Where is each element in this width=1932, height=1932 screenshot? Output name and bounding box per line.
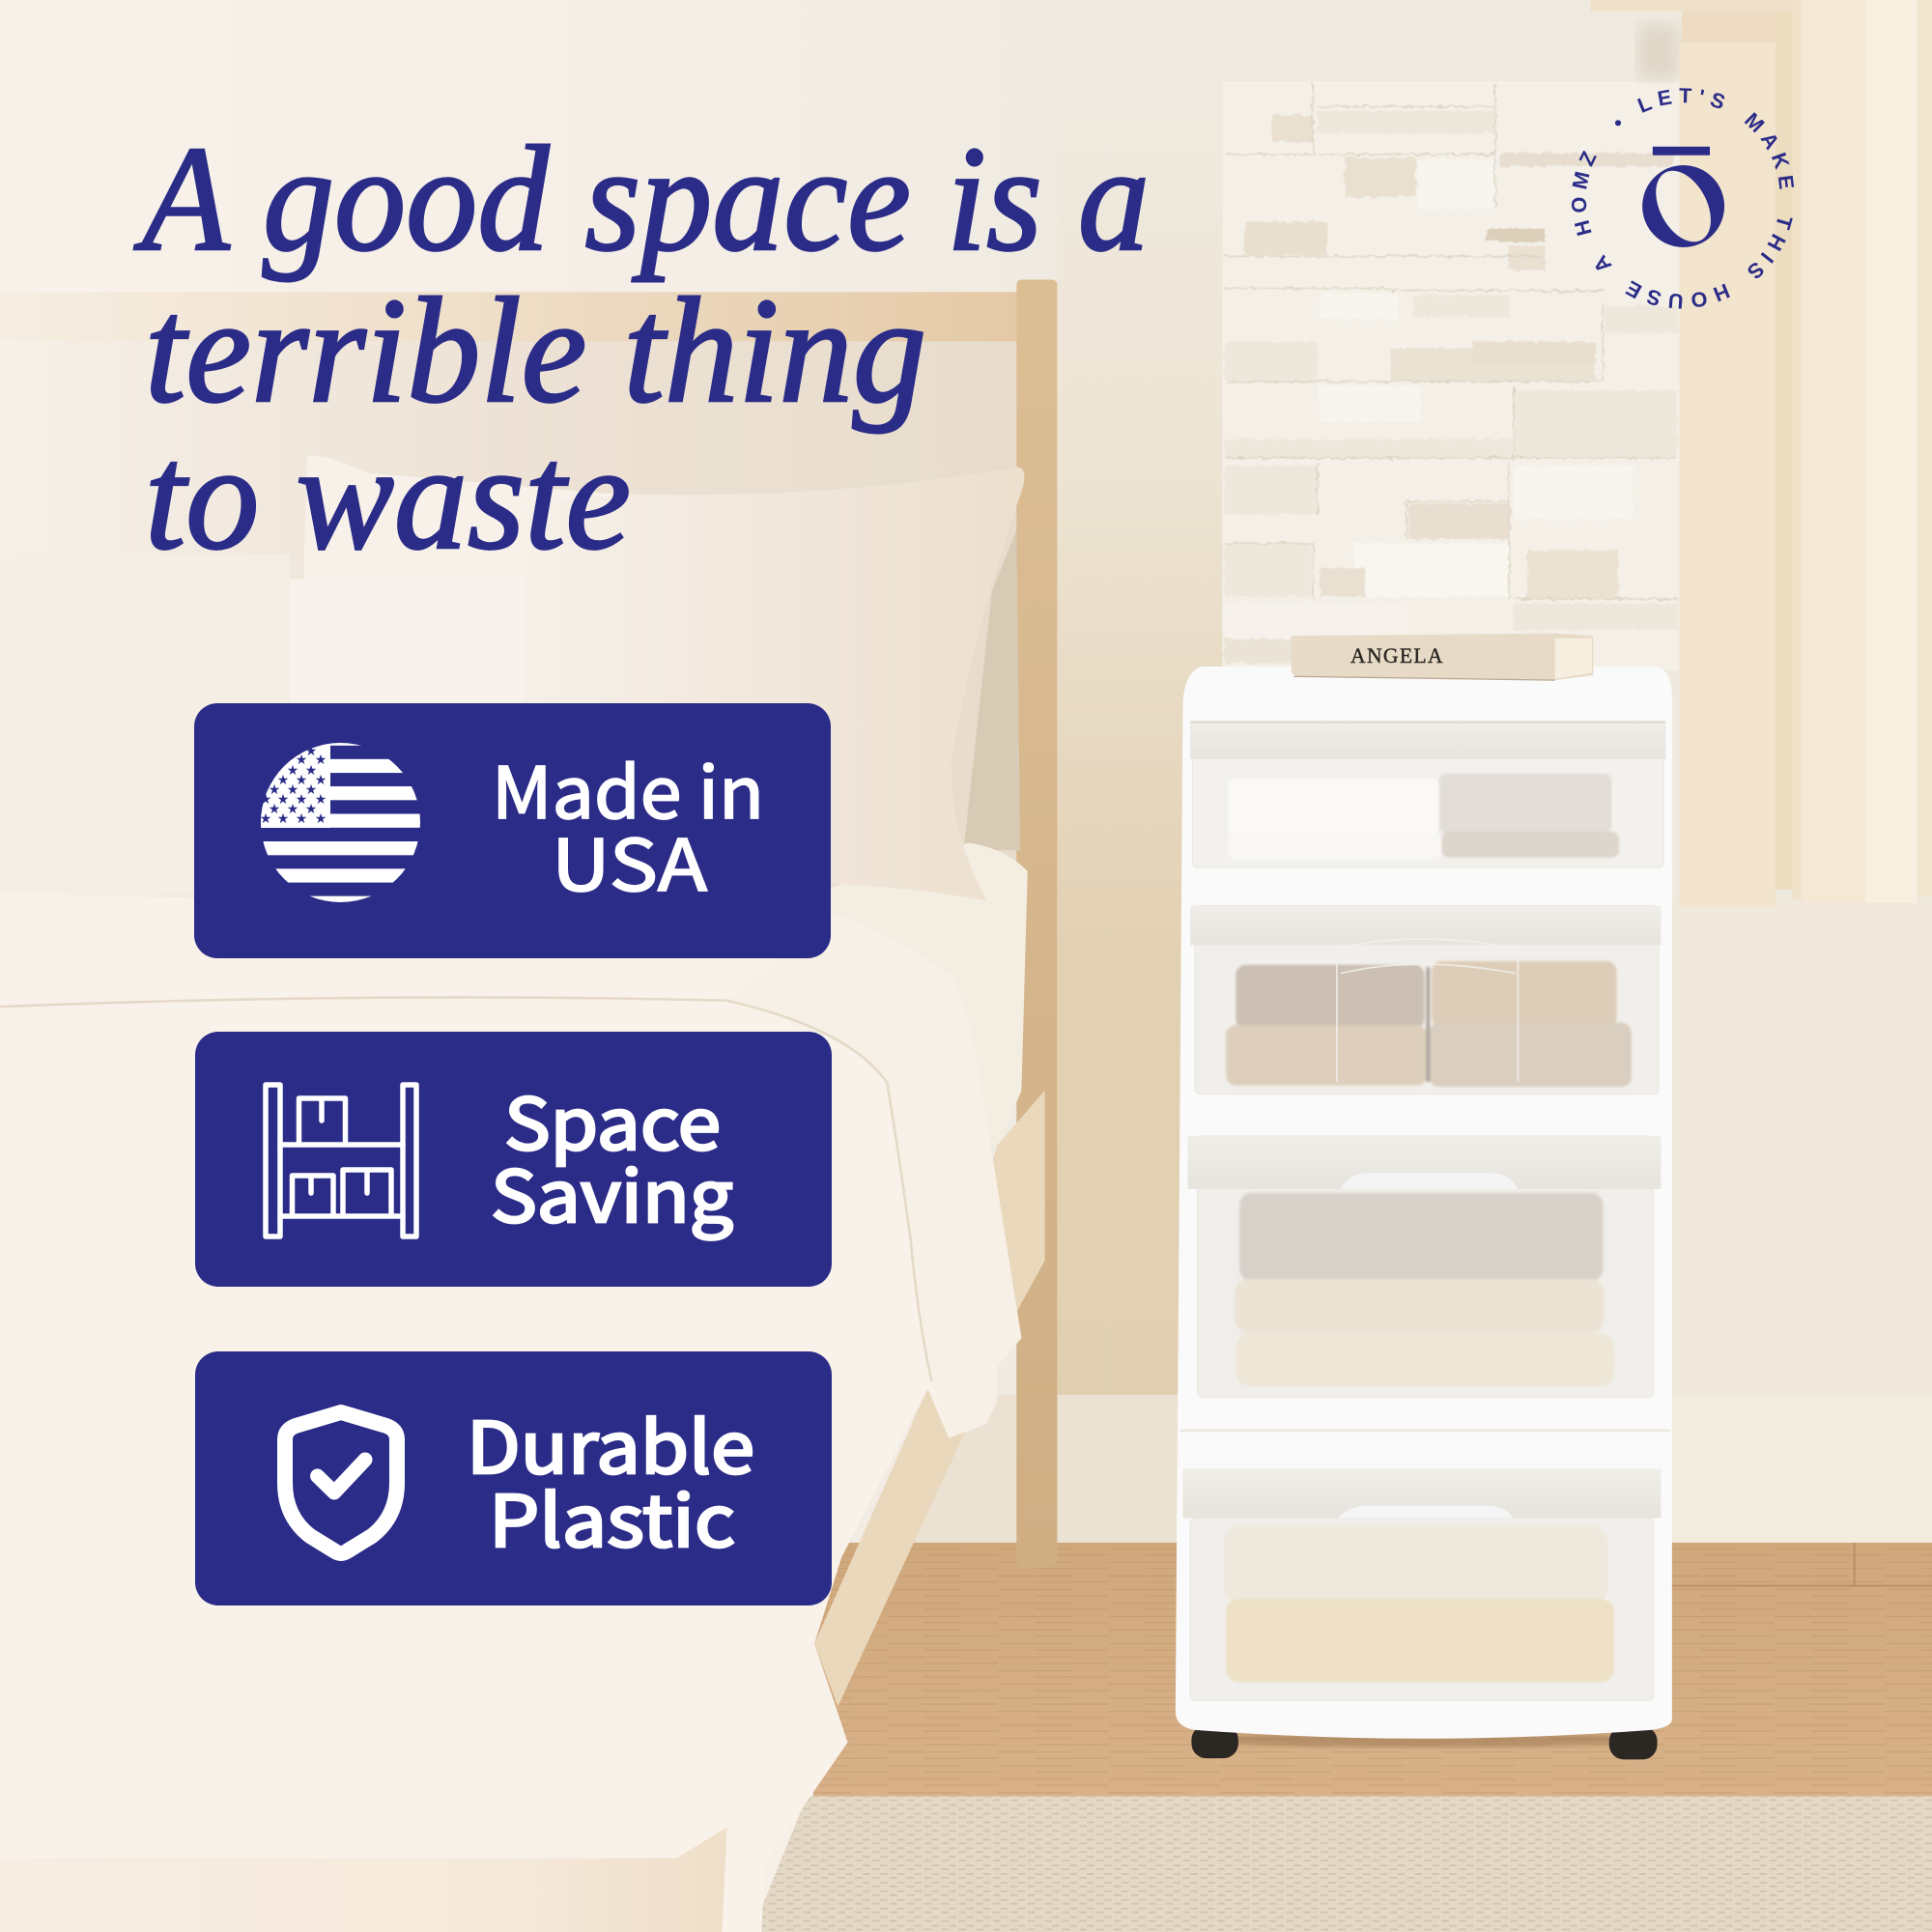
logo ring xyxy=(1642,165,1724,247)
upper wall above stone xyxy=(1213,0,1688,86)
bed post xyxy=(1016,280,1057,1567)
towels drawer 2 xyxy=(1226,961,1632,1087)
flag stars: ★ xyxy=(277,811,289,827)
bed base xyxy=(0,1828,727,1932)
front pillow xyxy=(524,467,1024,900)
brand badge xyxy=(1571,88,1795,309)
icon: shelf with boxes xyxy=(266,1085,416,1236)
towels drawer 3 xyxy=(1235,1193,1614,1386)
headboard rail xyxy=(0,292,1023,341)
handle xyxy=(1338,1506,1513,1518)
flag stars: ★ xyxy=(315,792,327,808)
flag stars: ★ xyxy=(277,792,289,808)
card background xyxy=(194,703,831,958)
flag stars: ★ xyxy=(305,763,317,779)
flag stars: ★ xyxy=(305,782,317,798)
headline line 1: A good space is a xyxy=(133,115,1150,282)
flag stars: ★ xyxy=(296,792,307,808)
flag stars: ★ xyxy=(315,811,327,827)
flag stars: ★ xyxy=(287,763,298,779)
right wall xyxy=(1663,899,1932,1405)
drawer 1 xyxy=(1190,722,1665,867)
label: Durable Plastic: Plastic xyxy=(489,1464,735,1568)
pillow shadow behind xyxy=(963,529,1020,850)
circular slogan: LET'S MAKE THIS HOUSE A HOMZ xyxy=(1571,88,1795,309)
badge dot xyxy=(1615,120,1621,126)
flag stars: ★ xyxy=(287,802,298,817)
handle xyxy=(1341,1173,1518,1189)
headline line 3: to waste xyxy=(145,413,631,581)
bed xyxy=(0,280,1057,1932)
badge: Space Saving xyxy=(195,1032,832,1287)
small cushion xyxy=(0,554,296,894)
flag stars: ★ xyxy=(296,773,307,788)
label: Made in USA: USA xyxy=(552,809,707,912)
flag stars xyxy=(260,744,327,827)
duvet xyxy=(0,894,1021,1932)
towels drawer 1 xyxy=(1227,774,1619,859)
badge: Durable Plastic xyxy=(195,1351,832,1605)
curtain xyxy=(1591,0,1932,905)
rug xyxy=(752,1797,1932,1932)
flag stars: ★ xyxy=(305,744,317,759)
logo bar xyxy=(1653,147,1710,156)
towels drawer 4 xyxy=(1224,1525,1614,1682)
label: Durable Plastic: Durable xyxy=(467,1391,754,1494)
card background xyxy=(195,1351,832,1605)
divider lip xyxy=(1180,1430,1671,1432)
label: Space Saving: Saving xyxy=(491,1140,733,1243)
dresser xyxy=(1176,667,1672,1759)
flag stars: ★ xyxy=(260,792,271,808)
wood floor xyxy=(813,1543,1932,1797)
headline xyxy=(133,115,1150,581)
flag stars: ★ xyxy=(269,802,280,817)
flag stars: ★ xyxy=(315,753,327,768)
flag stars: ★ xyxy=(260,811,271,827)
icon: USA flag xyxy=(261,743,420,902)
book xyxy=(1292,634,1593,680)
flag stars: ★ xyxy=(305,802,317,817)
wall nook beside dresser xyxy=(1057,0,1230,1552)
label: Made in USA: Made in xyxy=(492,736,764,839)
book title: ANGELA xyxy=(1350,644,1444,668)
label: Durable Plastic xyxy=(467,1391,754,1568)
pale cushion xyxy=(290,577,537,894)
card background xyxy=(195,1032,832,1287)
dresser frame xyxy=(1176,667,1672,1739)
flag stars: ★ xyxy=(296,753,307,768)
stone wall panel xyxy=(1222,81,1681,670)
drawer 3 xyxy=(1188,1136,1661,1397)
badge: Made in USA xyxy=(194,703,831,958)
blanket throw xyxy=(727,913,1021,1438)
label: Space Saving: Space xyxy=(504,1067,721,1171)
headline line 2: terrible thing xyxy=(145,267,926,434)
floor shadow xyxy=(1195,1732,1651,1747)
icon: shield with check xyxy=(285,1412,397,1553)
label: Space Saving xyxy=(491,1067,733,1243)
baseboard xyxy=(912,1395,1932,1545)
wheels xyxy=(1191,1725,1658,1759)
drawer 4 xyxy=(1182,1468,1661,1700)
flag stars: ★ xyxy=(277,773,289,788)
flag stars: ★ xyxy=(296,811,307,827)
label: Made in USA xyxy=(492,736,764,912)
flag stars: ★ xyxy=(269,782,280,798)
headboard panel xyxy=(0,332,1020,912)
bed side rail xyxy=(814,1091,1045,1707)
drawer 2 xyxy=(1190,905,1661,1094)
duvet fold xyxy=(0,997,931,1381)
back pillow xyxy=(296,456,739,887)
handle xyxy=(1337,939,1518,1082)
flag stars: ★ xyxy=(287,782,298,798)
mattress sheet xyxy=(813,842,1028,1149)
flag stars: ★ xyxy=(315,773,327,788)
